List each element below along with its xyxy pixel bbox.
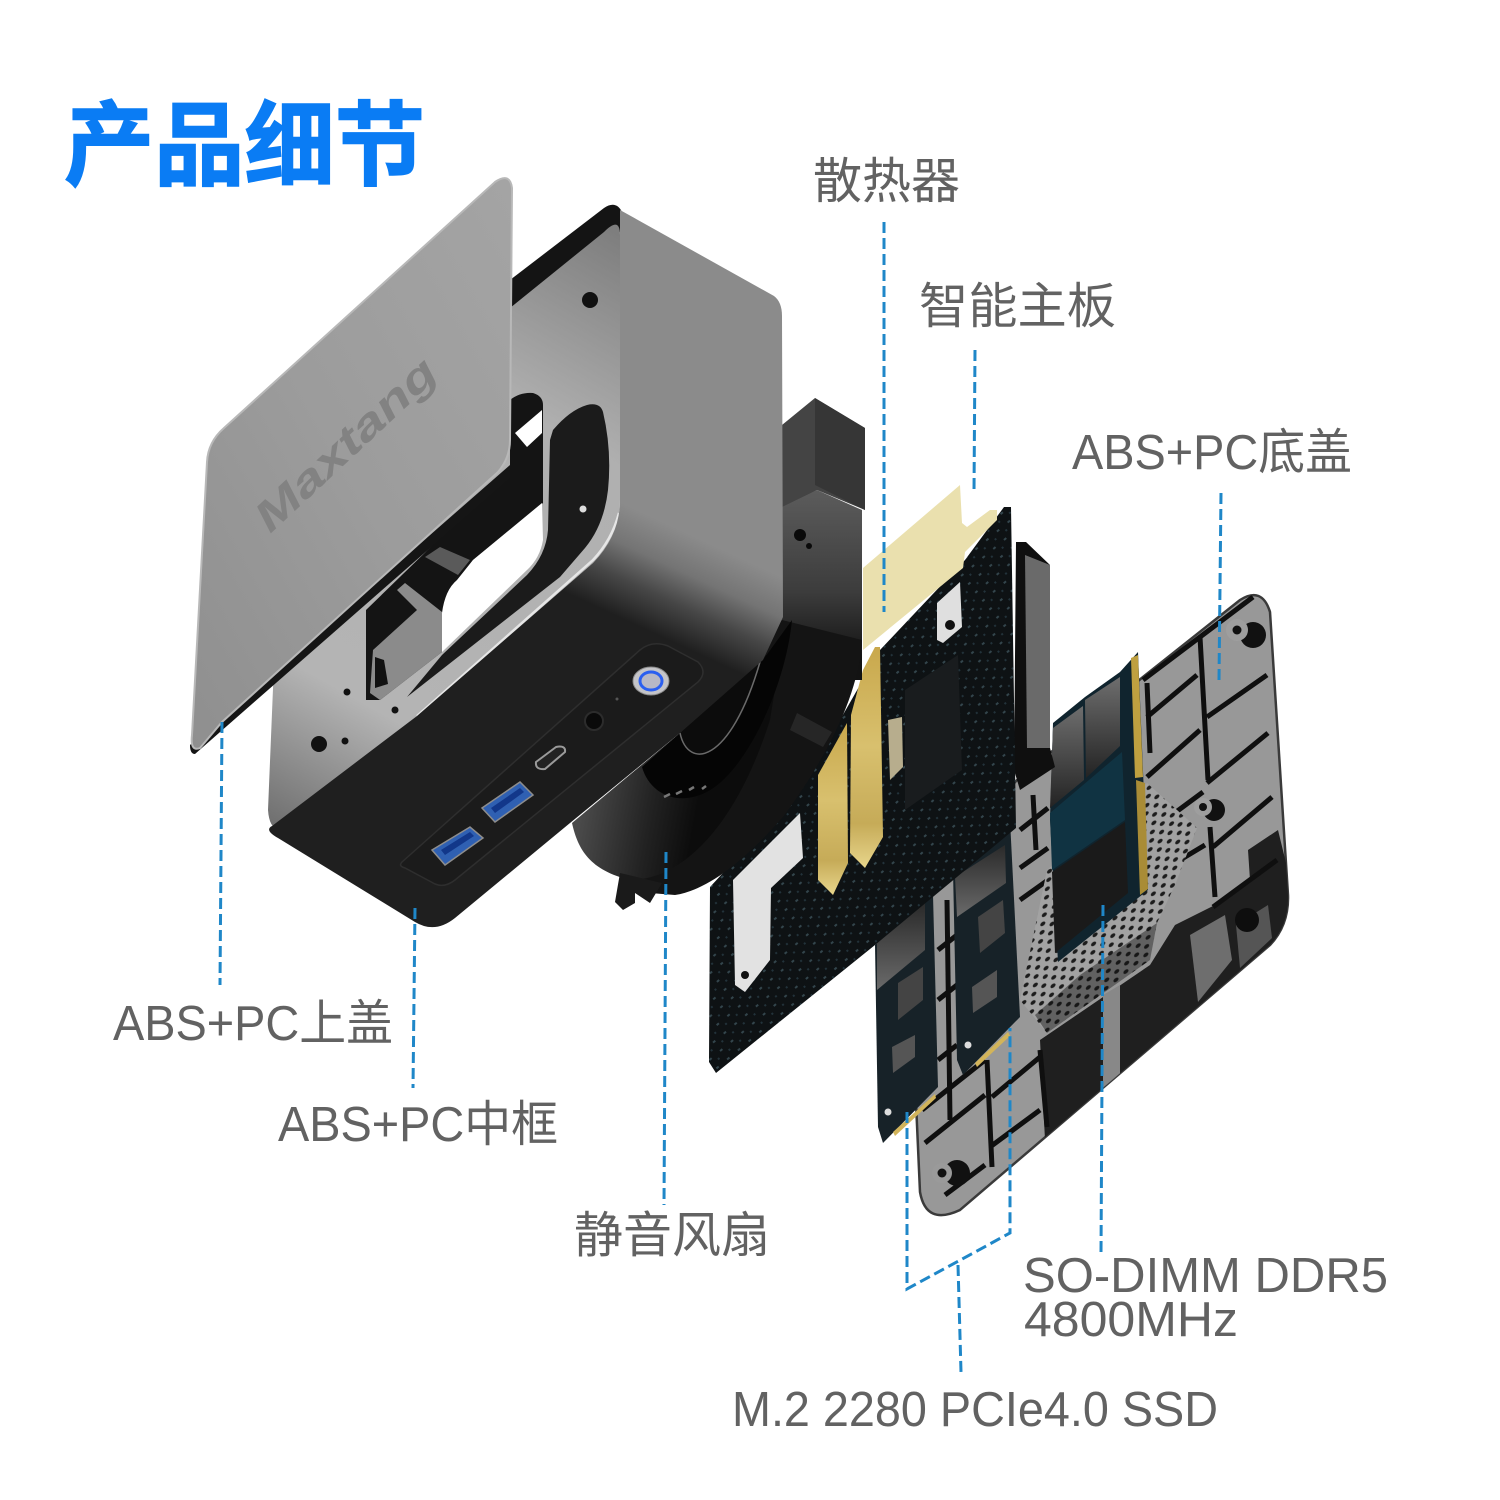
SSD module 1 [875, 895, 938, 1143]
ABS+PC bottom cover [915, 595, 1295, 1215]
frame top edge [510, 205, 622, 312]
upper chips [1050, 706, 1084, 808]
fan blades [642, 620, 792, 798]
mid-grey rib [425, 547, 470, 575]
label: top cover: ABS+PC上盖 [113, 997, 393, 1051]
frame screw holes [582, 292, 598, 308]
audio jack [585, 712, 603, 730]
heatsink [818, 485, 997, 895]
label: heatsink: 散热器 [813, 155, 960, 209]
USB-A port 1 [432, 827, 483, 865]
USB-C port [536, 747, 565, 769]
USB-A port 2 [482, 782, 533, 822]
fan cylinder [572, 640, 783, 880]
port recess [401, 644, 703, 885]
lower chips [1052, 822, 1128, 953]
label: motherboard: 智能主板 [919, 280, 1116, 334]
fan mount block [782, 398, 865, 510]
leader lines [220, 222, 1221, 1372]
gold contacts [1131, 655, 1143, 778]
fan plug [615, 873, 662, 910]
SSD module 2 [953, 820, 1020, 1075]
label: bottom cover: ABS+PC底盖 [1072, 426, 1352, 480]
grey inner strip [370, 583, 442, 700]
frame left face [268, 225, 620, 829]
perforated shield plate [1020, 783, 1197, 1033]
frame window black upper [366, 393, 543, 700]
fan housing upright [780, 490, 862, 680]
small black notch [375, 657, 388, 688]
silver edge [417, 513, 619, 716]
fan blade tips [664, 786, 706, 797]
frame shell face [269, 210, 783, 927]
thermal pad, upper [937, 582, 962, 643]
title: 产品细节 [64, 96, 425, 198]
fan hub arc [680, 662, 760, 754]
memory module [1050, 652, 1148, 962]
label: memory: SO-DIMM DDR5 [1023, 1249, 1388, 1303]
ABS+PC top cover [190, 178, 512, 754]
heatsink top sheet [863, 485, 997, 650]
label: middle frame: ABS+PC中框 [278, 1098, 558, 1152]
Maxtang logo: Maxtang [250, 343, 442, 545]
thermal pad, lower [733, 813, 803, 992]
label: fan: 静音风扇 [574, 1209, 770, 1263]
motherboard bracket [1014, 542, 1055, 790]
white opening large [442, 503, 543, 652]
power button [633, 667, 669, 695]
inner bevel reflection [407, 404, 609, 697]
flex connector [888, 717, 903, 780]
silent fan [572, 398, 865, 910]
fan disc [640, 620, 862, 895]
bosses [1240, 622, 1266, 648]
lower-right shadow [1040, 830, 1295, 1140]
heatsink fin right [850, 647, 883, 868]
teal PCB [1050, 752, 1125, 870]
ABS+PC middle frame [268, 205, 783, 927]
label: memory speed: 4800MHz [1024, 1293, 1238, 1347]
smart motherboard [709, 507, 1016, 1073]
heatsink fin left [818, 723, 848, 895]
blotch reflections [1190, 915, 1232, 1002]
white opening small [515, 410, 542, 447]
indicator dot [616, 698, 618, 700]
fan side tab [790, 713, 832, 747]
ribs [922, 597, 1277, 1195]
label: SSD: M.2 2280 PCIe4.0 SSD [732, 1383, 1218, 1437]
